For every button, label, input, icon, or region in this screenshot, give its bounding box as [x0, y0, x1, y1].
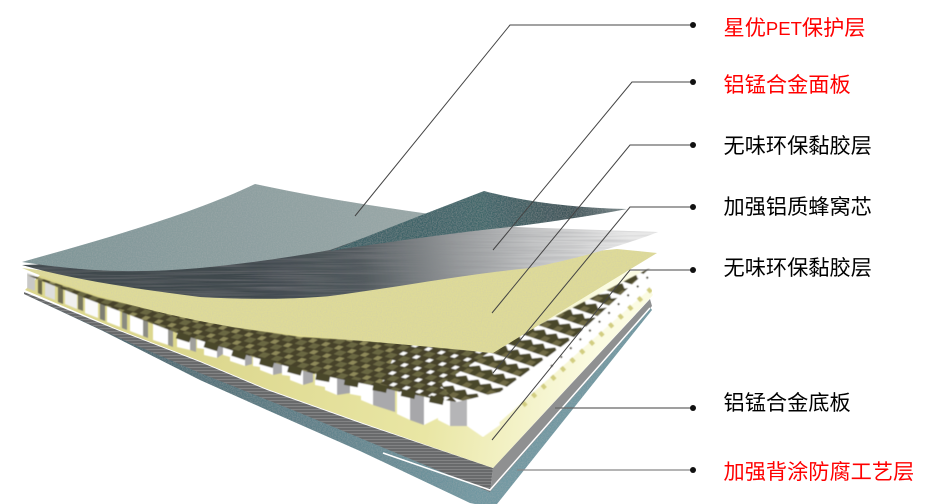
honeycomb core	[27, 268, 652, 437]
aluminium manganese face sheet	[22, 227, 658, 299]
label: backing layer: 加强背涂防腐工艺层	[724, 460, 914, 484]
leader lines	[355, 25, 693, 470]
core right wall sawtooth	[520, 289, 651, 408]
bottom layer: aluminium manganese base plate	[24, 292, 652, 492]
label: adhesive layer top: 无味环保黏胶层	[724, 134, 872, 158]
core front cells	[27, 273, 500, 437]
bottom layer: anti-corrosion backing	[24, 294, 652, 504]
leader dots	[690, 22, 696, 473]
core top surface right side	[440, 268, 650, 402]
label: PET protective layer: 星优PET保护层	[724, 16, 865, 40]
core top surface middle	[380, 343, 493, 402]
PET film curled edge	[330, 191, 627, 251]
label: face plate: 铝锰合金面板	[724, 73, 851, 97]
core dark spikes	[545, 277, 648, 372]
bottom adhesive layer	[25, 270, 653, 468]
core top surface	[27, 275, 420, 392]
PET protective film	[22, 184, 430, 271]
label: honeycomb core: 加强铝质蜂窝芯	[724, 195, 872, 219]
upper adhesive sheet	[22, 249, 657, 353]
core front edge hex tops	[177, 335, 450, 403]
core white right wall	[457, 268, 652, 437]
label: adhesive layer lower: 无味环保黏胶层	[724, 256, 872, 280]
label: base plate: 铝锰合金底板	[724, 391, 851, 415]
